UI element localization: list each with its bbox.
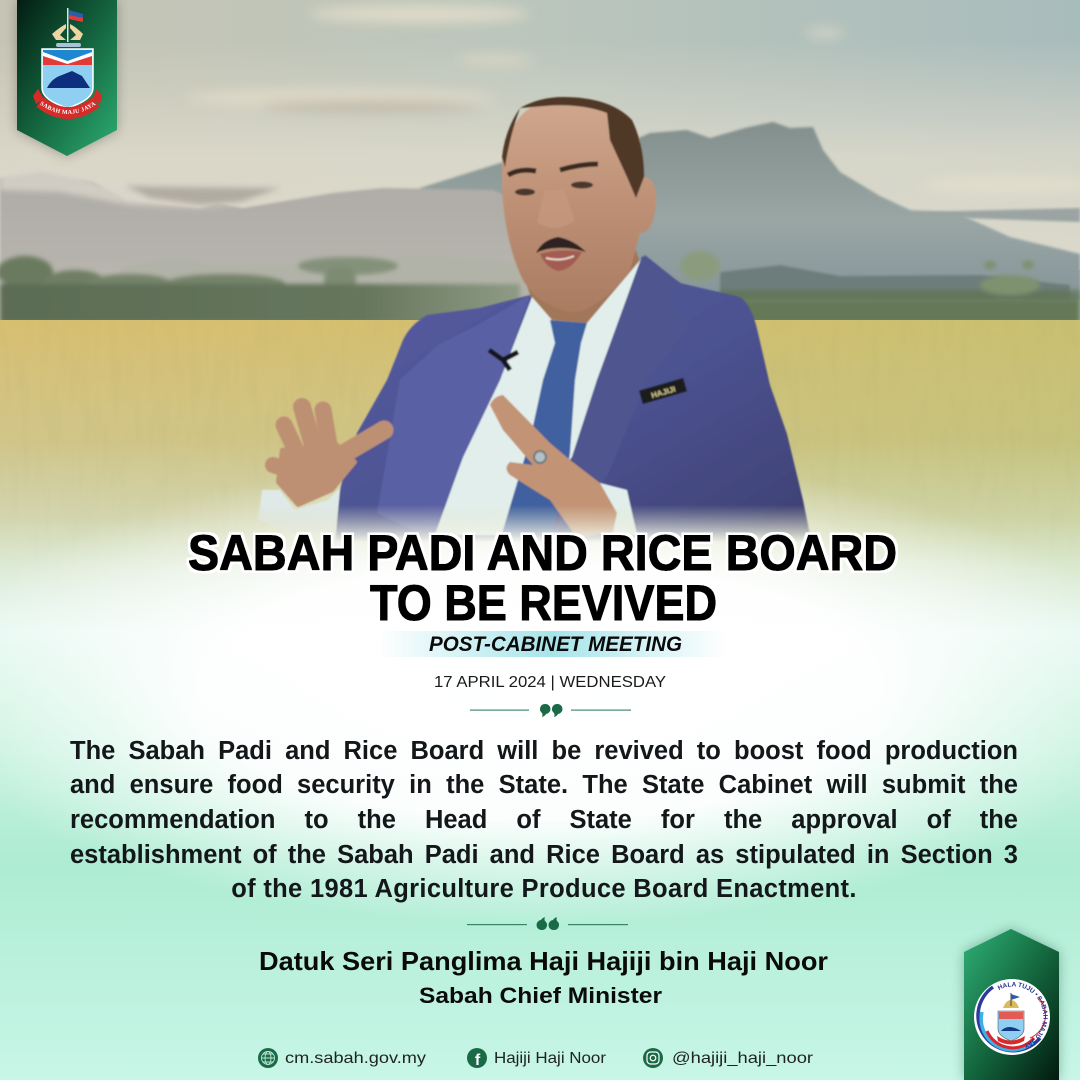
treeline	[0, 251, 1080, 325]
logo text: HALA TUJU • SABAH MAJU JAYA	[998, 982, 1048, 1048]
beads	[56, 43, 81, 47]
moustache and mouth	[536, 237, 586, 271]
footer: social handles: cm.sabah.gov.my	[285, 1050, 426, 1067]
body paragraph: recommendation to the Head of State for the approval of the	[70, 806, 1018, 834]
face	[502, 98, 656, 312]
footer: social handles: @hajiji_haji_noor	[672, 1050, 814, 1067]
right hand	[490, 395, 617, 538]
eyes, eyebrows, nose	[508, 164, 598, 228]
icon: facebook	[467, 1048, 487, 1069]
subtitle banner: post-cabinet meeting: POST-CABINET MEETING	[429, 633, 682, 656]
mini crest	[997, 993, 1025, 1044]
date line: 17 APRIL 2024 | WEDNESDAY	[434, 674, 666, 691]
left cuff	[258, 488, 340, 532]
body paragraph: establishment of the Sabah Padi and Rice Board as stipulated in Section 3	[70, 841, 1018, 869]
body paragraph: The Sabah Padi and Rice Board will be revived to boost food production	[70, 737, 1018, 765]
name badge: HAJIJI	[650, 385, 677, 400]
icon: globe	[258, 1048, 278, 1068]
speaker name and role: Datuk Seri Panglima Haji Hajiji bin Haji Noor	[259, 946, 828, 976]
shirt	[433, 258, 642, 535]
hair	[502, 97, 644, 198]
lapels	[377, 295, 530, 540]
shield	[42, 49, 93, 108]
motto scroll: SABAH MAJU JAYA	[40, 102, 96, 114]
microphone	[489, 350, 518, 370]
motto scroll	[33, 89, 102, 119]
icon: instagram	[643, 1048, 663, 1068]
body paragraph: and ensure food security in the State. The State Cabinet will submit the	[70, 771, 1018, 799]
clouds	[185, 5, 1080, 195]
left hand	[273, 407, 384, 505]
body paragraph: of the 1981 Agriculture Produce Board Enactment.	[231, 875, 857, 903]
far cloud band right	[920, 208, 1080, 222]
cloud bank on left range	[0, 166, 285, 208]
ring	[534, 451, 546, 463]
footer: social handles: Hajiji Haji Noor	[494, 1050, 607, 1067]
tie	[500, 320, 587, 540]
icon: facebook: f	[475, 1052, 481, 1069]
portrait: chief minister seated and gesturing	[258, 96, 810, 540]
arms holding flag	[52, 24, 83, 40]
flag	[67, 8, 83, 42]
main title: TO BE REVIVED	[370, 575, 717, 631]
logo swoosh	[978, 987, 1046, 1051]
main title: SABAH PADI AND RICE BOARD	[188, 525, 897, 581]
name badge	[639, 378, 687, 404]
suit jacket	[335, 255, 812, 545]
main mountains	[0, 122, 1080, 300]
right cuff	[600, 483, 637, 535]
speaker name and role: Sabah Chief Minister	[419, 983, 662, 1008]
neck	[526, 250, 640, 324]
